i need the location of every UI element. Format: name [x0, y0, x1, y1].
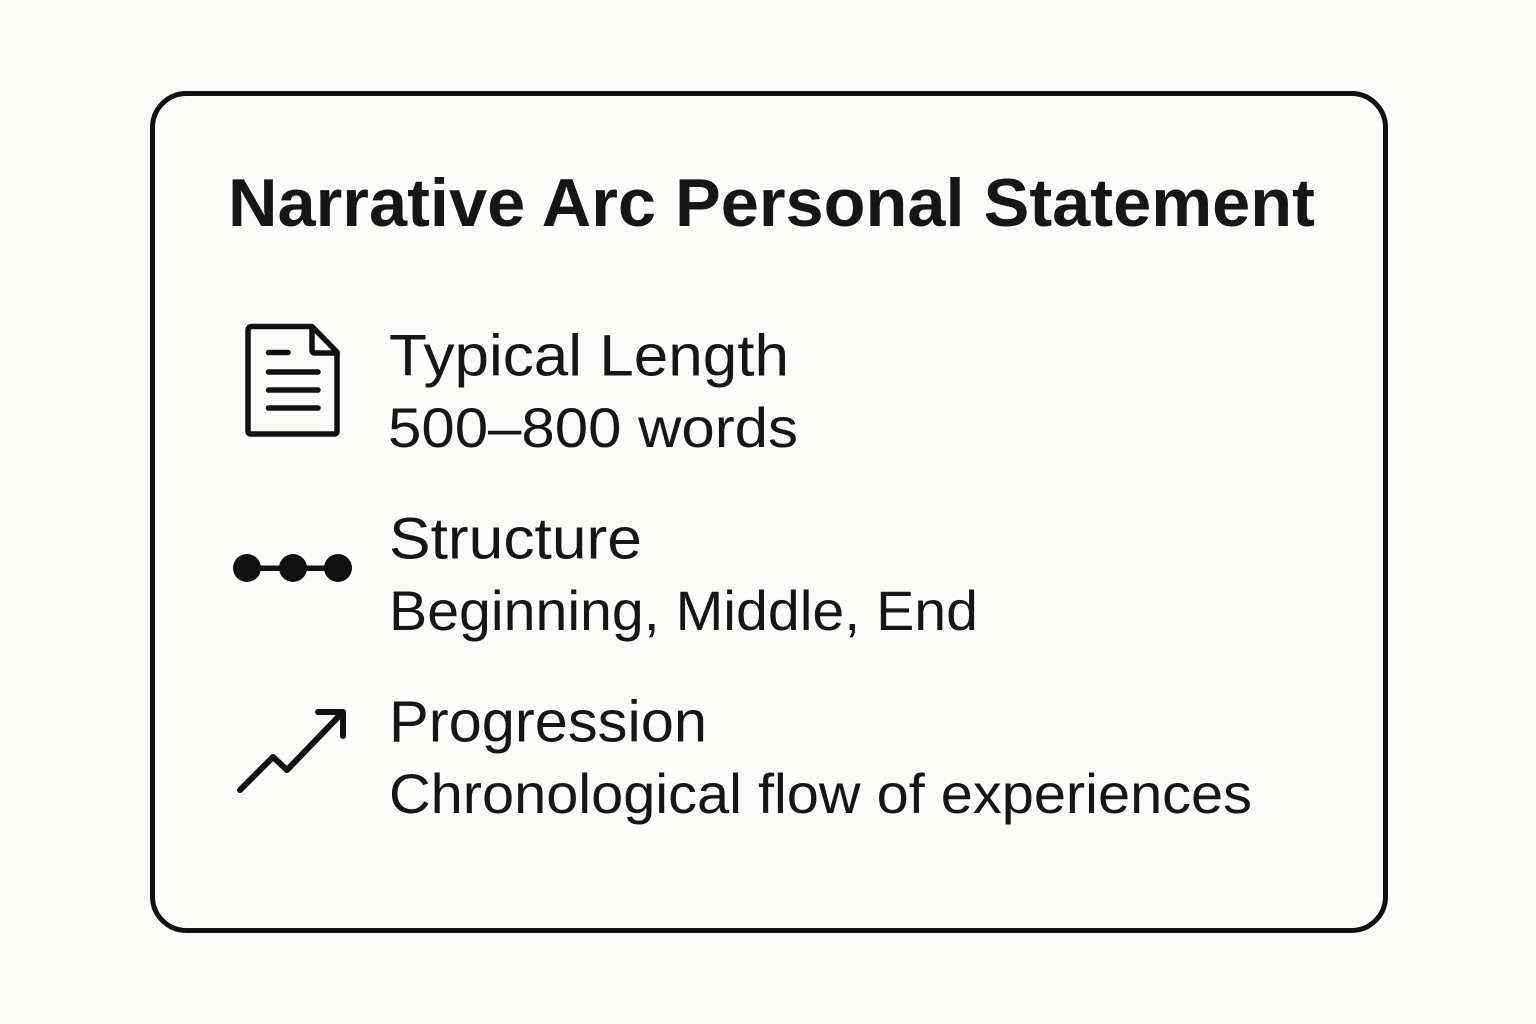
text block: structure: Structure: [389, 506, 642, 572]
text block: typical length: 500–800 words: [388, 396, 798, 459]
text block: structure: Beginning, Middle, End: [389, 579, 978, 642]
text block: progression: Chronological flow of experiences: [389, 762, 1252, 825]
text block: progression: Progression: [389, 690, 707, 754]
title: Narrative Arc Personal Statement: [228, 165, 1315, 241]
panel: card outline: [152, 94, 1386, 930]
text block: progression: [389, 690, 1252, 825]
icon: three connected dots: [233, 554, 352, 582]
text block: typical length: Typical Length: [389, 324, 789, 388]
text block: typical length: [388, 324, 798, 459]
icon: document: [248, 326, 337, 434]
icon: rising arrow: [240, 712, 343, 790]
text block: structure: [389, 506, 978, 642]
